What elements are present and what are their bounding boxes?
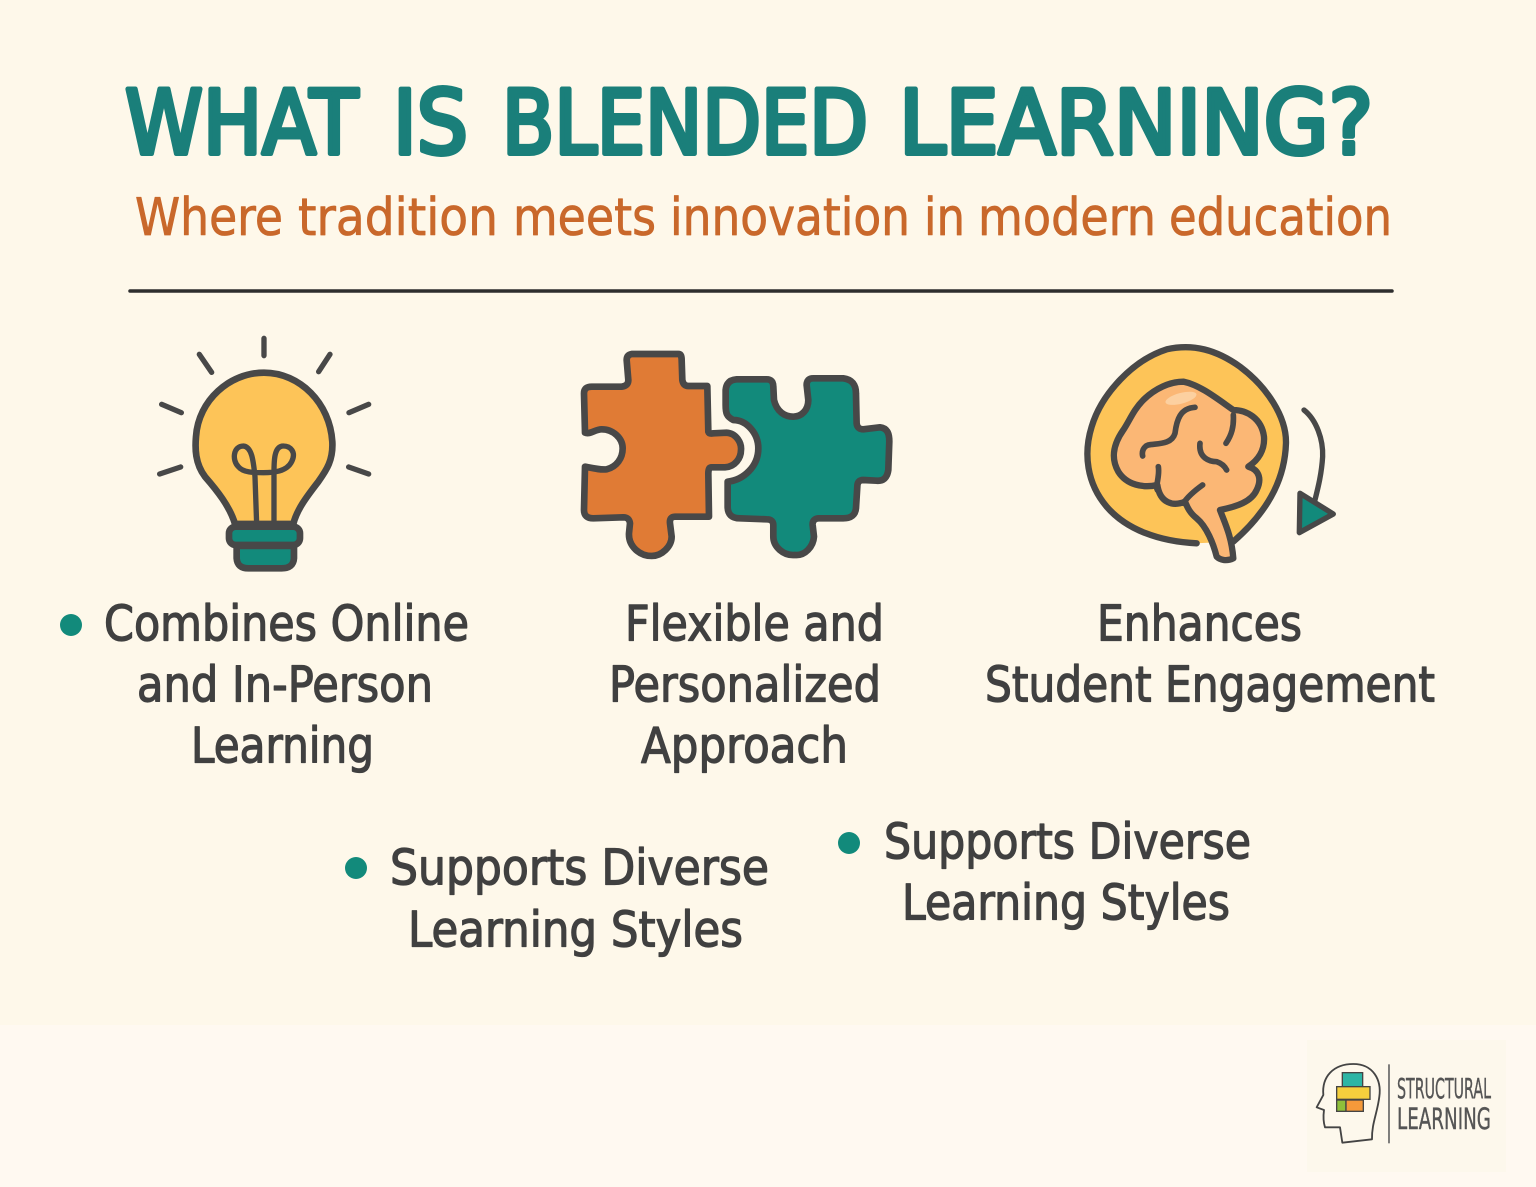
bullet text: supports diverse left: Supports Diverse [390, 840, 769, 896]
bullet text: combines online [60, 596, 469, 774]
bullet text: supports diverse left [345, 840, 769, 958]
subtitle: tradition [298, 188, 498, 248]
subtitle: meets [513, 188, 656, 248]
title [125, 72, 1373, 174]
subtitle: Where [135, 188, 283, 248]
bullet text: combines online: and In-Person [137, 656, 433, 714]
icon: light bulb [160, 338, 369, 568]
title: WHAT [125, 72, 359, 174]
icon: puzzle pieces [584, 354, 889, 556]
bullet text: supports diverse left: Learning Styles [408, 902, 743, 958]
text: flexible and personalized [609, 596, 884, 774]
bullet text: supports diverse right [838, 814, 1251, 932]
bullet text: supports diverse right: Supports Diverse [884, 814, 1251, 870]
bullet text: combines online: Combines Online [104, 596, 469, 652]
text: flexible and personalized: Approach [641, 718, 848, 774]
subtitle: modern [978, 188, 1156, 248]
bullet text: combines online: Learning [191, 718, 374, 774]
subtitle: in [924, 188, 965, 248]
title: IS [393, 72, 468, 174]
subtitle: education [1169, 188, 1392, 248]
subtitle: innovation [670, 188, 910, 248]
icon: brain with arrow [1087, 347, 1333, 560]
text: enhances engagement: Enhances [1097, 596, 1302, 652]
title: LEARNING? [899, 72, 1373, 174]
logo: structural learning [1307, 1040, 1506, 1172]
text: flexible and personalized: Flexible and [625, 596, 884, 652]
bullet text: supports diverse right: Learning Styles [902, 874, 1230, 932]
text: flexible and personalized: Personalized [609, 656, 881, 714]
subtitle [135, 188, 1392, 248]
text: enhances engagement: Student Engagement [985, 656, 1435, 714]
text: enhances engagement [985, 596, 1435, 714]
title: BLENDED [502, 72, 868, 174]
